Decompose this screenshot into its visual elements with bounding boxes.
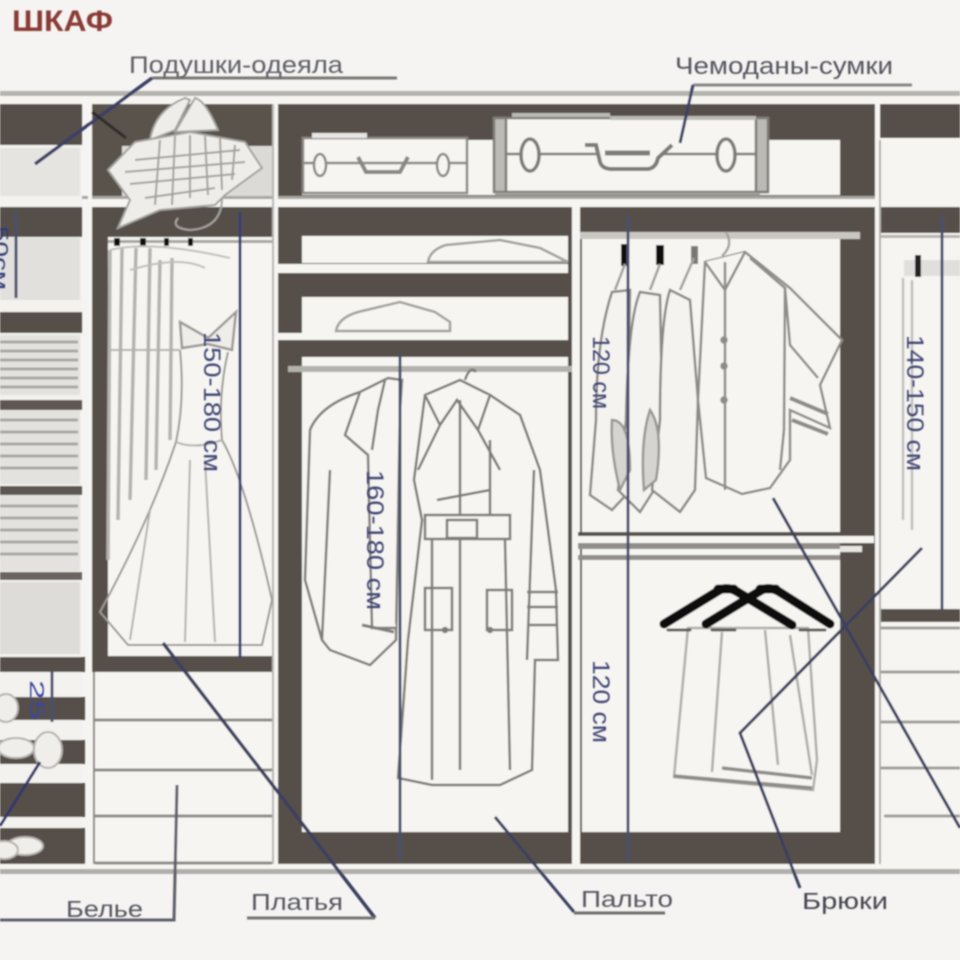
panel: centre shelves and coat compartment bbox=[278, 207, 580, 864]
label: suitcases and bags: Чемоданы-сумки bbox=[675, 53, 893, 80]
leader line: shoes bbox=[0, 762, 40, 826]
illustration: dress bbox=[100, 246, 272, 645]
dimension label: 120 cm upper: 120 см bbox=[587, 336, 614, 409]
icon: folded sweater on shelf 2 bbox=[336, 302, 450, 331]
dimension label: 160-180 cm: 160-180 см bbox=[361, 470, 388, 610]
leader line: coats bbox=[495, 817, 665, 913]
icon: right column hanger and garment bbox=[903, 255, 960, 530]
icon: two black hangers bbox=[664, 588, 830, 630]
leader line: underwear bbox=[0, 785, 177, 920]
panel: dress compartment bbox=[88, 104, 278, 864]
leader line: trousers bbox=[740, 548, 922, 888]
icon: small suitcase bbox=[303, 133, 467, 193]
label: pillows and blankets: Подушки-одеяла bbox=[129, 52, 344, 79]
leader line: suitcases and bags bbox=[680, 85, 912, 143]
panel: left column bbox=[0, 104, 85, 864]
dimension label: 150-180 cm: 150-180 см bbox=[198, 332, 225, 472]
shirt hanger hook bbox=[722, 232, 729, 256]
panel: shirts and trousers compartment bbox=[572, 207, 875, 864]
label: coats: Пальто bbox=[581, 886, 673, 912]
dimension label: 25: 25 bbox=[25, 680, 47, 720]
title: ШКАФ bbox=[12, 5, 113, 38]
illustration: hanging shirts bbox=[590, 244, 698, 512]
label: underwear: Белье bbox=[66, 896, 143, 922]
panel: top suitcase shelf bbox=[278, 104, 875, 196]
leader line: pillows and blankets bbox=[35, 78, 397, 164]
dimension line: coats height bbox=[398, 355, 402, 860]
dimension label: 140-150 cm: 140-150 см bbox=[901, 335, 928, 471]
label: trousers: Брюки bbox=[802, 888, 888, 914]
panel: underwear drawers bbox=[94, 672, 272, 864]
illustration: jacket bbox=[305, 378, 402, 665]
dimension line: right column height bbox=[940, 215, 944, 610]
icon: folded sweater on shelf 1 bbox=[428, 240, 568, 262]
label: dresses: Платья bbox=[251, 889, 343, 915]
leader line: shirts bbox=[773, 498, 960, 828]
illustration: main shirt bbox=[698, 252, 842, 494]
dimension label: 120 cm lower: 120 см bbox=[587, 660, 614, 743]
illustration: trousers bbox=[674, 628, 817, 790]
icon: shoes bbox=[0, 694, 62, 859]
icon: bag with handles bbox=[108, 98, 262, 230]
folded clothes stacks bbox=[0, 342, 78, 554]
leader line: dresses bbox=[163, 643, 375, 918]
icon: hangers rail clips bbox=[114, 238, 193, 246]
dimension line: shirts height bbox=[626, 215, 630, 532]
icon: large suitcase bbox=[494, 115, 768, 194]
panel: right column bbox=[875, 104, 960, 864]
dimension line: dresses height bbox=[238, 212, 242, 658]
dimension line: left shelf bbox=[16, 212, 52, 722]
illustration: trench coat bbox=[398, 370, 558, 785]
dimension line: trousers height bbox=[626, 536, 630, 862]
